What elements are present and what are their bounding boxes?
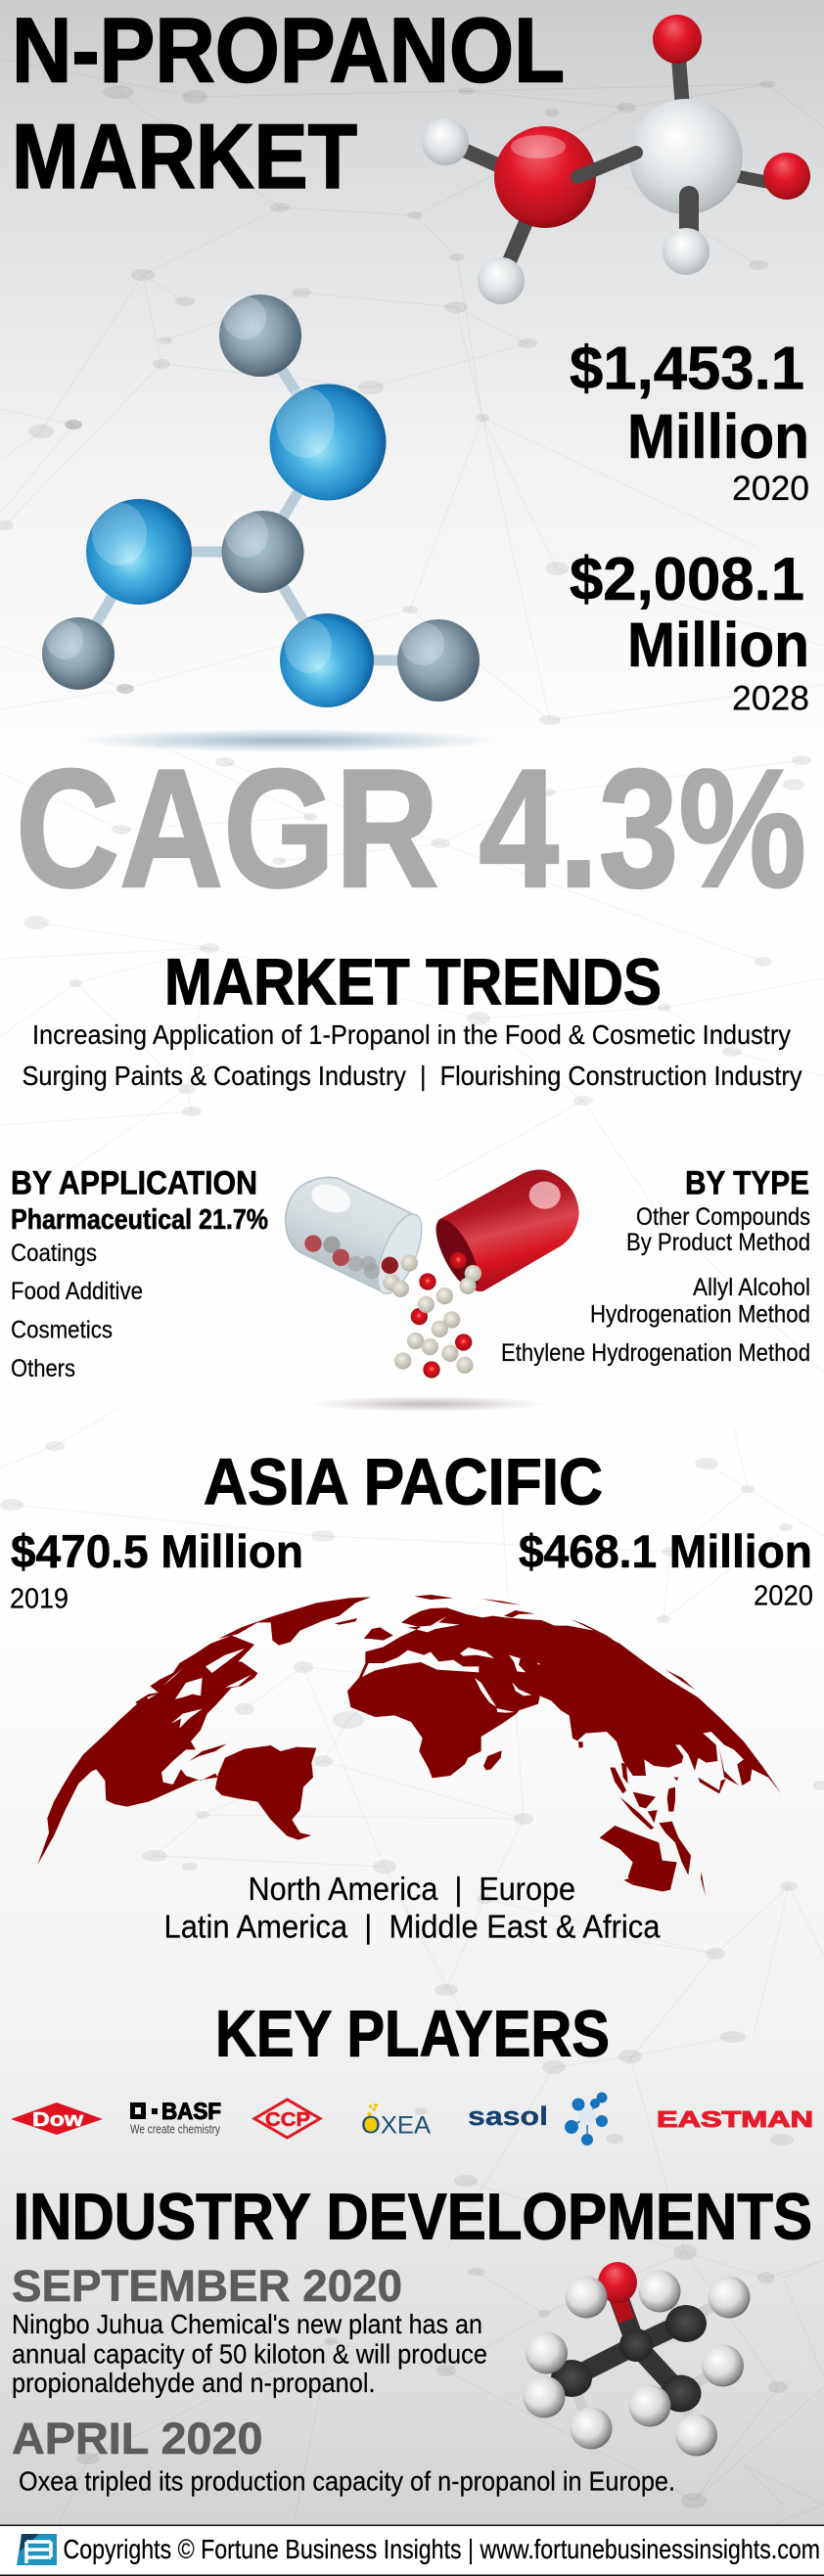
asia pacific 2020 value: 2020 <box>754 1581 813 1612</box>
panel: by application: Others <box>11 1355 75 1382</box>
market size 2020: Million <box>627 401 809 472</box>
title: N-PROPANOL <box>12 0 565 102</box>
panel: by type: Allyl Alcohol <box>693 1274 810 1301</box>
asia pacific 2020 value <box>519 1525 813 1612</box>
title <box>12 0 565 207</box>
asia pacific 2019 value: $470.5 Million <box>11 1525 303 1577</box>
panel: by application: Food Additive <box>11 1278 143 1305</box>
logo: BASF: We create chemistry <box>130 2123 221 2137</box>
other regions: North America | Europe <box>249 1871 575 1907</box>
icon: ball and stick molecule <box>523 2262 750 2456</box>
logo: sasol <box>468 2092 608 2146</box>
market size 2028: $2,008.1 <box>570 546 804 613</box>
logo: Dow <box>11 2102 103 2135</box>
logo: sasol: sasol <box>468 2101 548 2131</box>
footer <box>0 2524 824 2576</box>
panel: by type <box>501 1164 810 1367</box>
icon: open capsule with beads <box>286 1170 579 1412</box>
logo: Dow: Dow <box>32 2109 84 2131</box>
market size 2028: 2028 <box>732 679 809 718</box>
logo: Fortune Business Insights <box>17 2534 57 2565</box>
asia pacific 2019 value <box>10 1525 303 1614</box>
development: September 2020: propionaldehyde and n-propanol. <box>12 2368 376 2398</box>
panel: by application <box>11 1164 268 1382</box>
panel: by application: BY APPLICATION <box>11 1164 257 1201</box>
other regions <box>164 1871 661 1945</box>
logo: BASF <box>130 2099 221 2137</box>
development: September 2020 <box>12 2261 487 2398</box>
asia pacific heading: ASIA PACIFIC <box>204 1446 603 1518</box>
logo: CCP <box>254 2100 320 2138</box>
panel: by application: Cosmetics <box>11 1317 113 1344</box>
molecule shadow <box>78 729 499 752</box>
panel: by application: Pharmaceutical 21.7% <box>11 1204 268 1236</box>
market trends heading: MARKET TRENDS <box>164 945 662 1019</box>
logo: BASF: BASF <box>161 2099 221 2125</box>
asia pacific 2019 value: 2019 <box>10 1583 69 1614</box>
panel: by type: BY TYPE <box>685 1164 809 1201</box>
key players heading: KEY PLAYERS <box>215 1998 610 2070</box>
development: April 2020: APRIL 2020 <box>12 2414 262 2463</box>
market size 2028: Million <box>627 610 809 680</box>
logo: OXEA: OXEA <box>361 2111 431 2139</box>
market trends text <box>22 1019 802 1091</box>
icon: blue and gray molecule <box>42 294 480 707</box>
world map <box>37 1595 781 1896</box>
other regions: Latin America | Middle East & Africa <box>164 1908 661 1945</box>
market size 2020: 2020 <box>732 470 809 508</box>
development: April 2020: Oxea tripled its production capacity of n-propanol in Europe. <box>19 2465 675 2497</box>
market size 2020: $1,453.1 <box>570 335 804 403</box>
logo: CCP: CCP <box>265 2109 310 2131</box>
asia pacific 2020 value: $468.1 Million <box>519 1525 812 1577</box>
development: September 2020: SEPTEMBER 2020 <box>12 2261 402 2311</box>
market size 2028 <box>570 546 809 718</box>
title: MARKET <box>12 105 357 207</box>
logo: Eastman: EASTMAN <box>657 2106 813 2132</box>
development: April 2020 <box>12 2414 675 2497</box>
icon: red and white molecule <box>422 15 810 304</box>
development: September 2020: Ningbo Juhua Chemical's new plant has an <box>12 2309 482 2339</box>
panel: by application: Coatings <box>11 1240 97 1267</box>
development: September 2020: annual capacity of 50 kiloton & will produce <box>12 2338 487 2370</box>
market size 2020 <box>570 335 809 508</box>
